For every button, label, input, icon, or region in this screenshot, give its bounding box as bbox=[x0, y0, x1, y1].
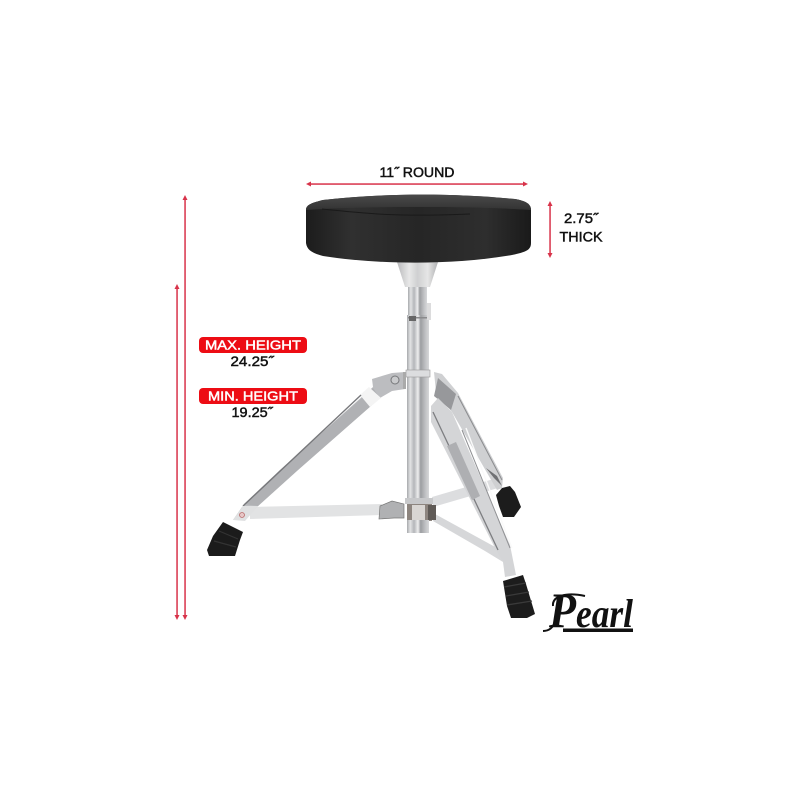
logo: Pearl: Pearl bbox=[548, 582, 634, 638]
leg: back right bbox=[434, 372, 503, 490]
seat cushion bbox=[306, 195, 531, 263]
arrow: seat thickness bbox=[548, 201, 552, 258]
leg: left bbox=[233, 372, 405, 521]
foot: front right bbox=[503, 575, 535, 618]
arrow: max height bbox=[182, 195, 188, 620]
foot: back right bbox=[496, 486, 521, 517]
label: thickness bbox=[560, 211, 602, 244]
badge: min height: MIN. HEIGHT bbox=[208, 388, 298, 404]
badge: max height: MAX. HEIGHT bbox=[205, 338, 301, 352]
value: max height: 24.25˝ bbox=[230, 354, 275, 369]
brace: left horizontal bbox=[250, 504, 382, 519]
pole: lower tube bbox=[407, 373, 429, 533]
stool: chrome stand, legs and seat bbox=[207, 195, 535, 618]
label: 11 inch round: 11˝ ROUND bbox=[380, 165, 455, 180]
arrow: min height bbox=[174, 284, 180, 620]
pole: upper assembly bbox=[403, 287, 431, 389]
foot: back hidden rubber bbox=[472, 485, 483, 513]
arrow: seat width bbox=[306, 182, 528, 186]
label: thickness: 2.75˝ bbox=[564, 211, 600, 226]
label: thickness: THICK bbox=[560, 230, 602, 244]
brace: front right bbox=[433, 514, 503, 562]
leg: front right bbox=[431, 398, 516, 577]
value: min height: 19.25˝ bbox=[232, 405, 274, 420]
badge: min height bbox=[199, 388, 307, 404]
foot: left bbox=[207, 522, 243, 556]
seat cone bbox=[397, 262, 438, 287]
brace: back right bbox=[432, 478, 498, 507]
clamp: pole base bbox=[379, 498, 436, 533]
